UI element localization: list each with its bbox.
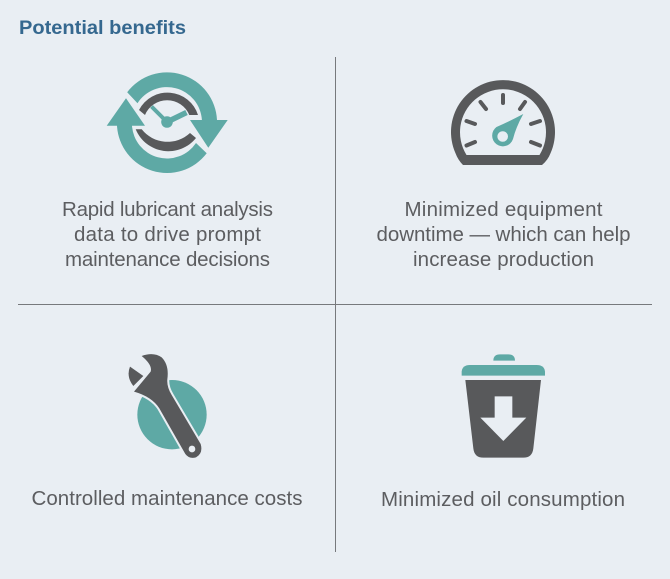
icon: gauge	[451, 80, 555, 165]
icon: clock with cycle arrows	[107, 72, 228, 173]
text: rapid analysis	[62, 198, 273, 271]
text: downtime: downtime — which can help	[376, 223, 630, 246]
panel: rapid analysis	[62, 72, 273, 271]
text: rapid analysis: data to drive prompt	[74, 223, 261, 246]
icon: trash bin with down arrow	[462, 354, 545, 458]
panel: maintenance costs	[32, 354, 302, 510]
text: downtime: Minimized equipment	[404, 198, 603, 221]
text: rapid analysis: maintenance decisions	[65, 248, 270, 271]
text: downtime: increase production	[413, 248, 594, 271]
text: rapid analysis: Rapid lubricant analysis	[62, 198, 273, 221]
text: maintenance costs: Controlled maintenance costs	[32, 487, 302, 510]
panel: oil consumption	[381, 354, 625, 511]
title: Potential benefits	[19, 18, 186, 39]
text: oil consumption: Minimized oil consumption	[381, 488, 625, 511]
panel: downtime	[376, 80, 630, 271]
text: downtime	[376, 198, 630, 271]
icon: wrench	[129, 354, 207, 458]
